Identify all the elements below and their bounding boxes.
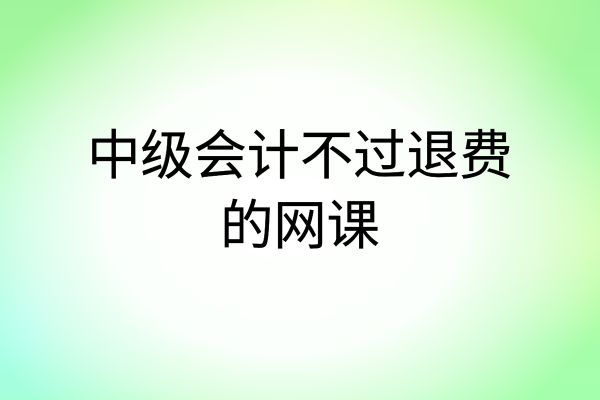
title: 的网课 bbox=[220, 197, 380, 256]
title: 中级会计不过退费 bbox=[87, 127, 513, 186]
title bbox=[87, 127, 513, 256]
